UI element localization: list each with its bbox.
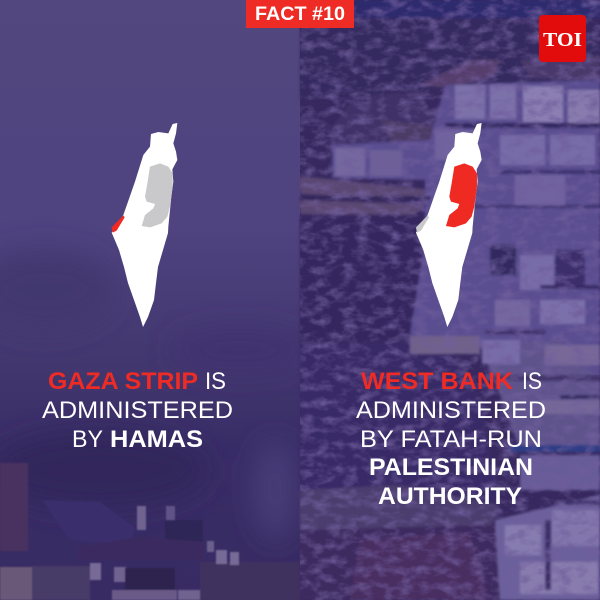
building blocks bbox=[455, 85, 485, 119]
text: Gaza Strip statement bbox=[42, 368, 233, 453]
text: Gaza Strip statement: BY bbox=[72, 426, 103, 453]
text: West Bank statement bbox=[356, 368, 546, 510]
text: West Bank statement: AUTHORITY bbox=[378, 483, 522, 510]
map: Gaza Strip highlighted bbox=[112, 123, 177, 327]
village base bbox=[332, 80, 600, 380]
text: Gaza Strip statement: ADMINISTERED bbox=[42, 397, 233, 424]
logo: TOI: TOI bbox=[543, 29, 582, 51]
text: Gaza Strip statement: IS bbox=[205, 368, 226, 395]
logo: TOI bbox=[539, 15, 586, 62]
banner: FACT #10 bbox=[246, 0, 354, 28]
lower hillside bbox=[300, 215, 440, 345]
panel: Gaza smoke photo background bbox=[0, 0, 310, 600]
text: West Bank statement: PALESTINIAN bbox=[369, 454, 533, 481]
text: Gaza Strip statement: HAMAS bbox=[110, 426, 203, 453]
fields bbox=[300, 176, 432, 200]
panel: West Bank settlement photo background bbox=[300, 0, 600, 600]
photo grain bbox=[300, 0, 600, 600]
map: West Bank highlighted bbox=[416, 123, 482, 327]
hill bbox=[330, 92, 440, 150]
text: West Bank statement: ADMINISTERED bbox=[356, 397, 546, 424]
banner: FACT #10: FACT #10 bbox=[255, 4, 345, 25]
dark streaks bbox=[445, 123, 600, 128]
text: West Bank statement: IS bbox=[522, 368, 542, 395]
text: West Bank statement: WEST BANK bbox=[361, 368, 514, 395]
text: West Bank statement: BY FATAH-RUN bbox=[360, 426, 542, 453]
text: Gaza Strip statement: GAZA STRIP bbox=[48, 368, 198, 395]
